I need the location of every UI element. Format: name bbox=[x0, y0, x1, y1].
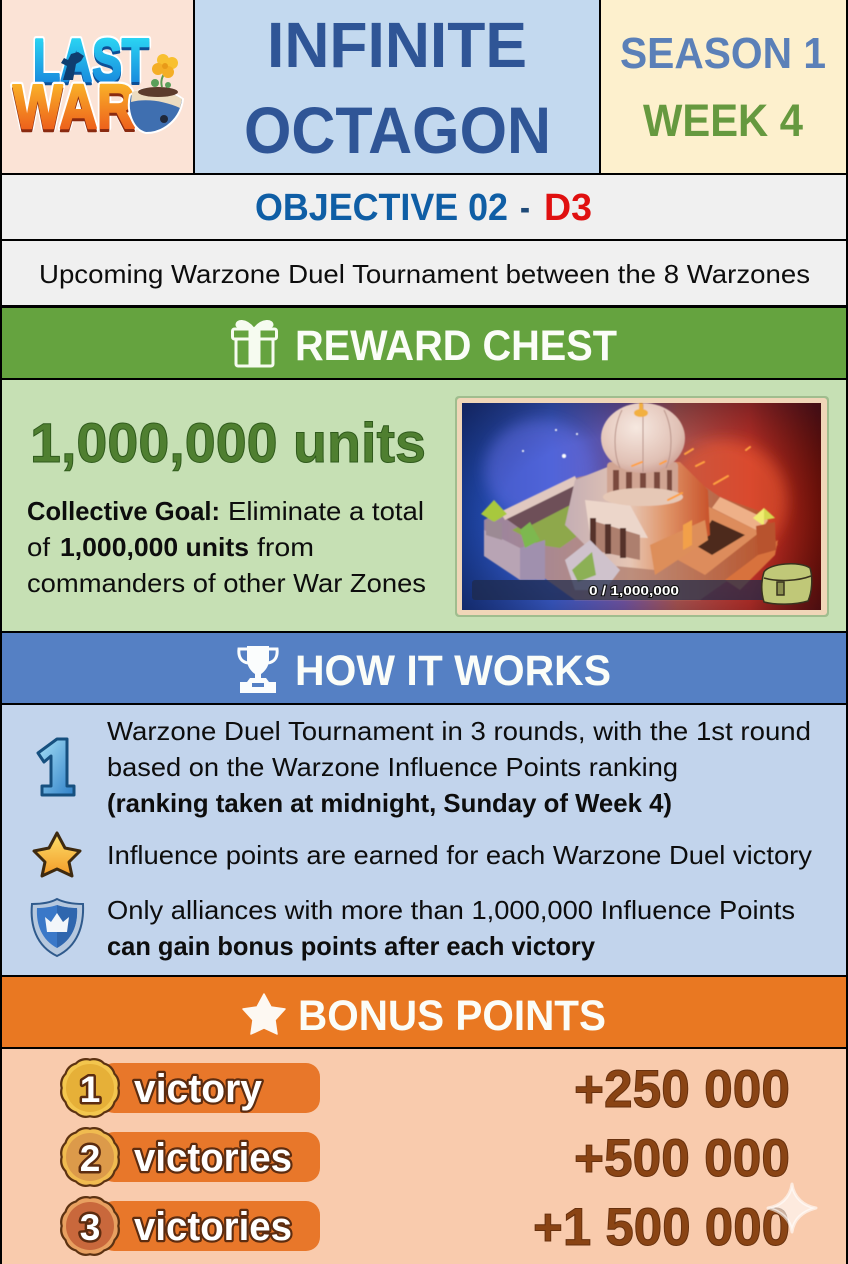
row: 1 victory bbox=[60, 1058, 320, 1118]
objective dash: - bbox=[520, 187, 530, 229]
heading: bonus points: BONUS POINTS bbox=[298, 992, 606, 1040]
step 1 text: Warzone Duel Tournament in 3 rounds, with the 1st round bbox=[107, 716, 811, 746]
big goal number: 1,000,000 units bbox=[30, 411, 426, 474]
panel: reward details bbox=[2, 380, 846, 631]
row: 3 victories: victories bbox=[134, 1205, 292, 1249]
outer walls bbox=[484, 470, 778, 600]
title line 2: OCTAGON bbox=[244, 93, 551, 167]
icon: treasure chest bbox=[762, 564, 812, 604]
objective day: D3 bbox=[544, 187, 592, 229]
icon: trophy bbox=[239, 646, 277, 693]
row: 1 victory: victory bbox=[134, 1067, 263, 1111]
icon: star bbox=[243, 994, 285, 1034]
bonus value 1: +250 000 bbox=[574, 1060, 790, 1119]
goal description: Eliminate a total bbox=[228, 496, 424, 526]
sparks bbox=[632, 447, 750, 500]
goal description: from bbox=[257, 532, 314, 562]
season label: SEASON 1 bbox=[620, 29, 826, 78]
icon: number one bbox=[38, 739, 74, 795]
panel: bonus points rows bbox=[2, 1049, 846, 1264]
row: 2 victories bbox=[60, 1127, 320, 1187]
row: 2 victories: victories bbox=[134, 1136, 292, 1180]
progress text: 0 / 1,000,000 bbox=[589, 583, 679, 598]
goal description: of bbox=[27, 532, 51, 562]
illustration: octagon building with progress bar bbox=[455, 396, 829, 617]
logo: Last War: LAST bbox=[33, 30, 149, 97]
week label: WEEK 4 bbox=[643, 95, 803, 146]
goal description bbox=[27, 496, 426, 598]
panel: bonus points header bbox=[2, 977, 846, 1047]
step 1 text: (ranking taken at midnight, Sunday of Week 4) bbox=[107, 788, 672, 818]
progress bar bbox=[472, 580, 772, 600]
logo: Last War bbox=[13, 27, 183, 145]
panel: logo bbox=[2, 0, 193, 173]
goal description: Collective Goal: bbox=[27, 496, 220, 526]
row: 3 victories bbox=[60, 1196, 320, 1256]
panel: reward chest header bbox=[2, 308, 846, 378]
panel: how it works details bbox=[2, 705, 846, 975]
panel: title bbox=[195, 0, 599, 173]
icon: sparkle watermark bbox=[768, 1184, 816, 1232]
panel: how it works header bbox=[2, 633, 846, 703]
bonus value 2: +500 000 bbox=[574, 1129, 790, 1188]
icon: star bbox=[34, 833, 80, 876]
step 1 text bbox=[107, 716, 811, 818]
goal description: 1,000,000 units bbox=[60, 532, 249, 562]
row: 1 victory: 1 bbox=[80, 1069, 100, 1110]
row: 3 victories: 3 bbox=[80, 1207, 100, 1248]
corner towers bbox=[481, 500, 507, 522]
panel: description bbox=[2, 241, 846, 305]
drum and dome bbox=[607, 462, 678, 498]
description text: Upcoming Warzone Duel Tournament between the 8 Warzones bbox=[39, 259, 810, 289]
logo: Last War: WAR bbox=[13, 73, 135, 142]
icon: shield with crown bbox=[32, 899, 83, 956]
logo: Last War: WAR bbox=[13, 76, 135, 145]
central building bbox=[565, 462, 710, 570]
row: 2 victories: 2 bbox=[80, 1138, 100, 1179]
step 2 text: Influence points are earned for each Warzone Duel victory bbox=[107, 840, 812, 870]
goal description: commanders of other War Zones bbox=[27, 568, 426, 598]
step 3 text bbox=[107, 895, 795, 961]
logo: Last War: WAR bbox=[13, 73, 135, 142]
step 3 text: Only alliances with more than 1,000,000 Influence Points bbox=[107, 895, 795, 925]
heading: how it works: HOW IT WORKS bbox=[295, 647, 611, 695]
icon: gift bbox=[232, 320, 276, 366]
bonus value 3: +1 500 000 bbox=[533, 1198, 790, 1257]
step 1 text: based on the Warzone Influence Points ranking bbox=[107, 752, 678, 782]
panel: season and week bbox=[601, 0, 846, 173]
objective heading: OBJECTIVE 02 bbox=[255, 187, 508, 229]
heading: reward chest: REWARD CHEST bbox=[295, 322, 617, 370]
panel: objective bbox=[2, 175, 846, 239]
step 3 text: can gain bonus points after each victory bbox=[107, 931, 596, 961]
logo: Last War: LAST bbox=[33, 27, 149, 94]
title line 1: INFINITE bbox=[267, 9, 527, 81]
logo: Last War: LAST bbox=[33, 27, 149, 94]
